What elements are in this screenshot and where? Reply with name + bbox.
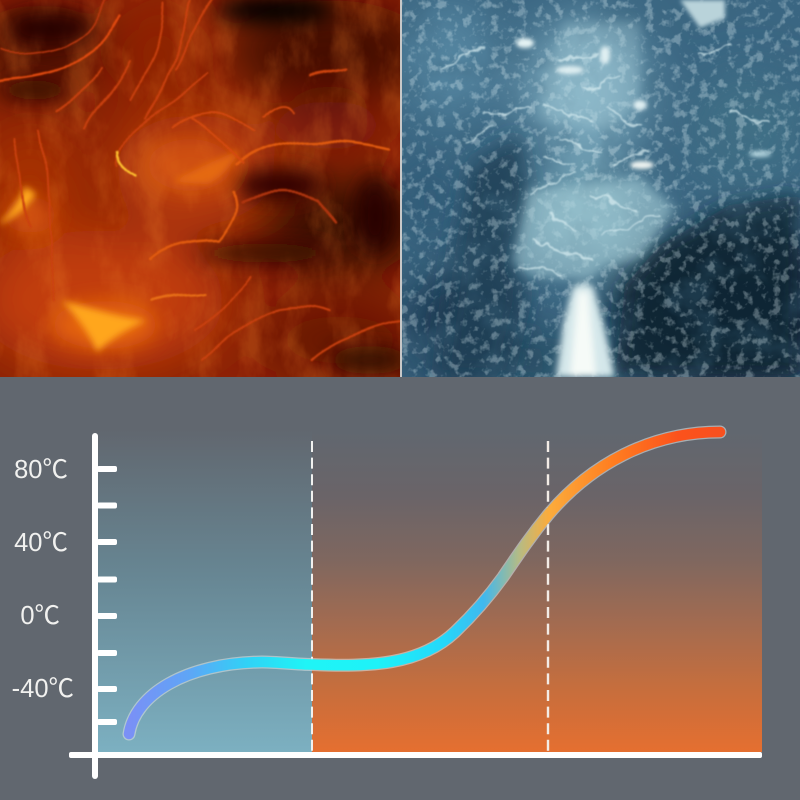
y axis labels [12,456,74,703]
flame wisps texture [0,0,400,377]
panel: warm region [312,432,762,752]
y axis labels: -40℃ [12,675,74,703]
panel: chart background [0,377,800,800]
photo: fire [0,0,430,380]
ice shading texture [417,59,800,377]
divider: dashed line right [547,441,549,752]
temperature curve [129,432,720,734]
white separator between photos [400,0,402,377]
waterfall [556,284,615,377]
x axis [69,752,762,758]
photo: ice and waterfall [400,0,800,387]
y axis labels: 40℃ [14,529,68,557]
y axis labels: 80℃ [14,456,68,484]
y axis with ticks [92,433,117,779]
divider: dashed line left [311,441,313,752]
y axis labels: 0℃ [20,602,60,630]
panel: cold region [98,430,312,752]
ice highlights texture [402,0,800,377]
